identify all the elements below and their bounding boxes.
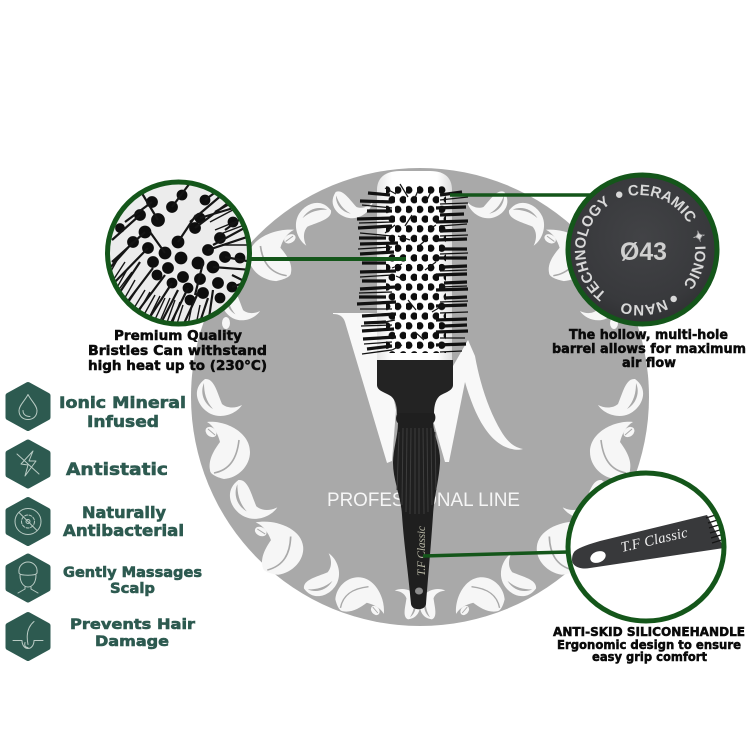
handle print: T.F Classic <box>416 526 428 576</box>
decorative leaf ring <box>197 181 643 622</box>
callout: bristles <box>88 328 267 374</box>
callout: barrel <box>552 328 746 371</box>
icon: face with towel <box>8 556 48 600</box>
callout: handle <box>553 625 745 664</box>
bristles <box>357 192 468 349</box>
connector lines <box>250 195 592 556</box>
callout: handle: ANTI-SKID SILICONEHANDLE <box>553 625 745 639</box>
barrel holes <box>386 186 446 353</box>
feature: gently massages scalp: Gently Massages <box>63 565 202 581</box>
icon: crossed bacteria <box>8 500 48 544</box>
feature: naturally antibacterial <box>8 500 184 544</box>
callout: barrel: The hollow, multi-hole <box>569 328 728 343</box>
feature: prevents hair damage: Damage <box>95 634 169 650</box>
handle hole <box>590 551 606 563</box>
feature: naturally antibacterial: Naturally <box>82 503 167 522</box>
collar <box>377 360 453 414</box>
callout: bristles: Bristles Can withstand <box>88 343 267 359</box>
feature: gently massages scalp <box>8 556 202 600</box>
handle print: T.F Classic <box>619 525 690 556</box>
handle grip <box>393 413 440 609</box>
callout: barrel: barrel allows for maximum <box>552 342 746 357</box>
feature: antistatic <box>8 442 168 486</box>
inset bristles <box>111 185 247 322</box>
inset: handle close-up <box>568 473 728 621</box>
handle ribs <box>706 515 722 544</box>
icon: crossed bolt <box>8 442 48 486</box>
curved label text: CERAMIC ✦ IONIC●NANOTECHNOLOGY● <box>574 184 706 316</box>
feature: gently massages scalp: Scalp <box>110 581 155 597</box>
grip ribs <box>397 428 436 514</box>
ceramic barrel <box>377 171 452 360</box>
hang hole <box>415 588 423 594</box>
inset holes <box>116 190 245 305</box>
feature: ionic mineral infused: Infused <box>87 412 159 431</box>
inset ring <box>568 473 724 621</box>
feature: antistatic: Antistatic <box>66 460 168 480</box>
feature: ionic mineral infused <box>8 384 186 431</box>
callout: handle: easy grip comfort <box>592 650 707 664</box>
callout: handle: Ergonomic design to ensure <box>557 638 741 652</box>
callout: bristles: high heat up to (230°C) <box>88 358 267 374</box>
icon: water drop <box>8 384 48 428</box>
brush product photo <box>357 171 468 609</box>
callout: bristles: Premium Quality <box>114 328 242 344</box>
inset: bristles close-up <box>106 182 252 330</box>
diameter label: Ø43 <box>620 238 667 266</box>
inset ring <box>108 182 250 324</box>
feature: naturally antibacterial: Antibacterial <box>63 521 184 540</box>
feature: prevents hair damage <box>8 614 196 658</box>
inset: barrel label <box>566 172 720 326</box>
callout: barrel: air flow <box>622 356 676 371</box>
feature: prevents hair damage: Prevents Hair <box>70 617 196 633</box>
icon: hair follicle <box>8 614 48 658</box>
handle tip <box>572 515 724 569</box>
feature: ionic mineral infused: Ionic Mineral <box>59 393 186 412</box>
background logo disc <box>191 168 649 626</box>
logo W monogram <box>333 313 396 463</box>
logo wordmark: PROFESSIONAL LINE <box>327 489 520 511</box>
